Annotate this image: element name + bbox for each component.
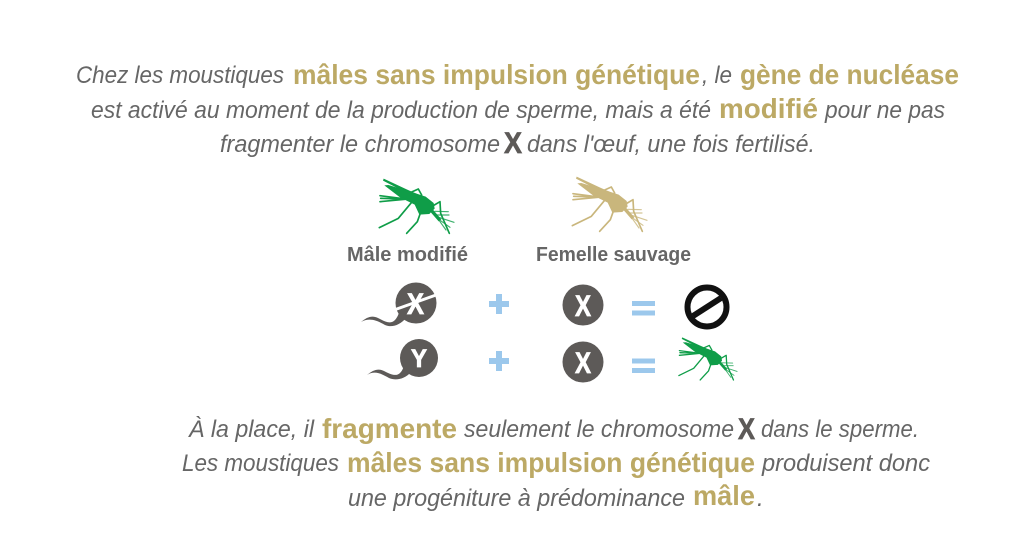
- bottom text block: mâles sans impulsion génétique: [347, 447, 755, 478]
- bottom text block: fragmente: [322, 413, 457, 444]
- bottom text block: À la place, il: [188, 416, 315, 443]
- bottom text block: [182, 413, 930, 512]
- icon: X chromosome, row 2: [562, 342, 604, 382]
- top text block: , le: [702, 62, 732, 89]
- top text block: Chez les moustiques: [76, 62, 284, 89]
- icon: green male offspring mosquito: [679, 337, 737, 380]
- icon: sperm with Y chromosome: Y: [411, 345, 427, 373]
- top text block: [76, 59, 959, 160]
- icon: green modified male mosquito: [379, 179, 454, 233]
- bottom text block: Les moustiques: [182, 450, 339, 477]
- icon: sperm with Y chromosome: [367, 339, 438, 379]
- equals sign, row 2: [632, 361, 655, 370]
- top text block: modifié: [719, 93, 818, 124]
- bottom text block: dans le sperme.: [761, 416, 919, 443]
- bottom text block: une progéniture à prédominance: [348, 485, 685, 512]
- top text block: gène de nucléase: [740, 59, 959, 90]
- top text block: dans l'œuf, une fois fertilisé.: [527, 131, 815, 158]
- top text block: fragmenter le chromosome: [220, 131, 500, 158]
- icon: sperm with fragmented X chromosome: X: [407, 288, 424, 321]
- bottom text block: X: [738, 413, 755, 446]
- top text block: mâles sans impulsion génétique: [293, 59, 700, 90]
- icon: X chromosome, row 2: X: [575, 347, 591, 380]
- icon: X chromosome, row 1: [562, 284, 604, 326]
- plus sign, row 1: [489, 294, 509, 314]
- icon: sperm with fragmented X chromosome: [361, 282, 436, 326]
- plus sign, row 2: [489, 351, 509, 371]
- label: modified male: Mâle modifié: [347, 244, 468, 266]
- top text block: est activé au moment de la production de sperme, mais a été: [91, 97, 711, 124]
- equals sign, row 1: [632, 304, 655, 313]
- label: wild female: Femelle sauvage: [536, 244, 691, 266]
- bottom text block: seulement le chromosome: [464, 416, 734, 443]
- icon: X chromosome, row 1: X: [575, 290, 591, 323]
- top text block: pour ne pas: [824, 97, 945, 124]
- top text block: X: [504, 127, 522, 160]
- icon: tan wild female mosquito: [572, 177, 647, 231]
- bottom text block: produisent donc: [761, 450, 930, 477]
- bottom text block: .: [757, 485, 764, 512]
- icon: prohibited symbol: [688, 288, 726, 326]
- bottom text block: mâle: [693, 480, 755, 511]
